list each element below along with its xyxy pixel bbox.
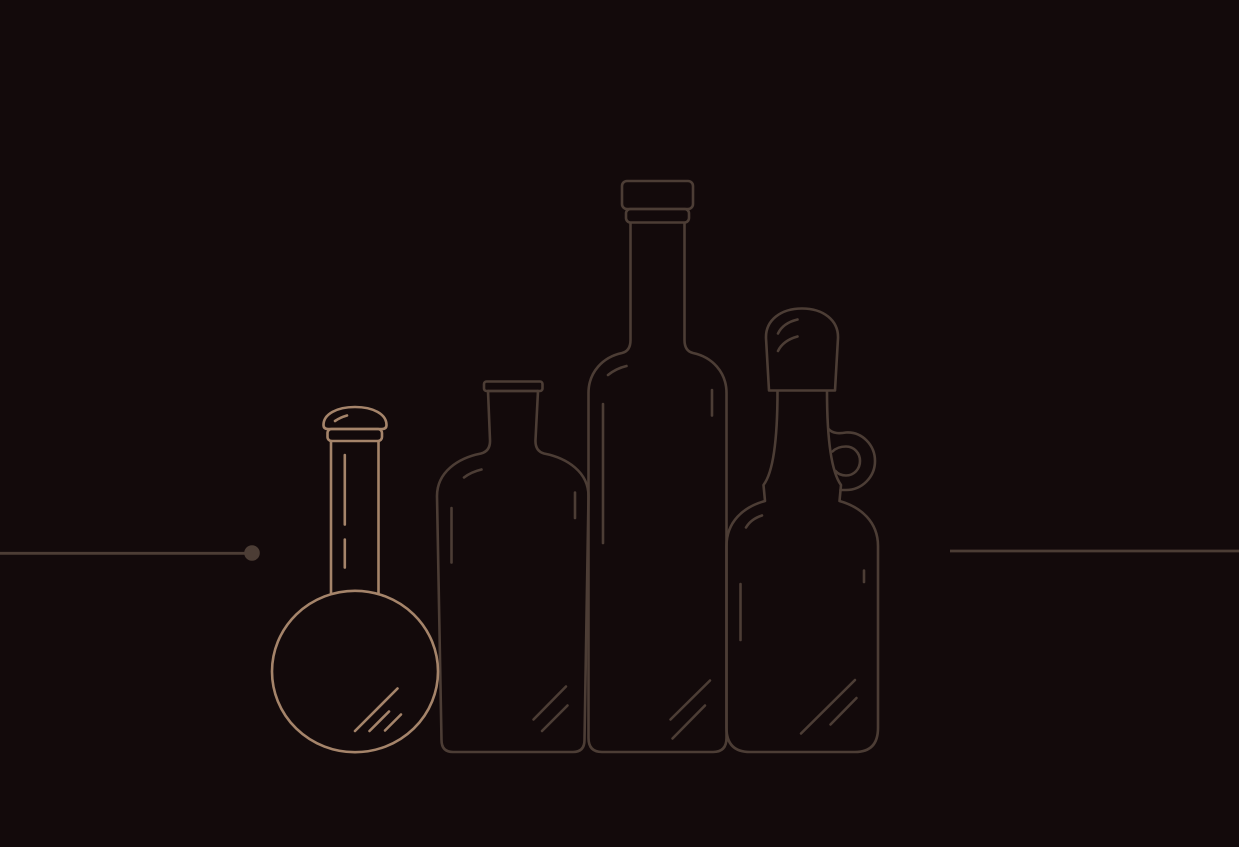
bottle: jug with handle [726, 308, 878, 752]
jug handle [828, 429, 875, 490]
bottle: tall bottle [588, 181, 726, 752]
right horizontal line [950, 550, 1239, 552]
bottle: square medicine bottle [437, 382, 588, 752]
bottle: round flask (highlighted) [272, 407, 438, 752]
left horizontal line with dot [0, 545, 260, 561]
